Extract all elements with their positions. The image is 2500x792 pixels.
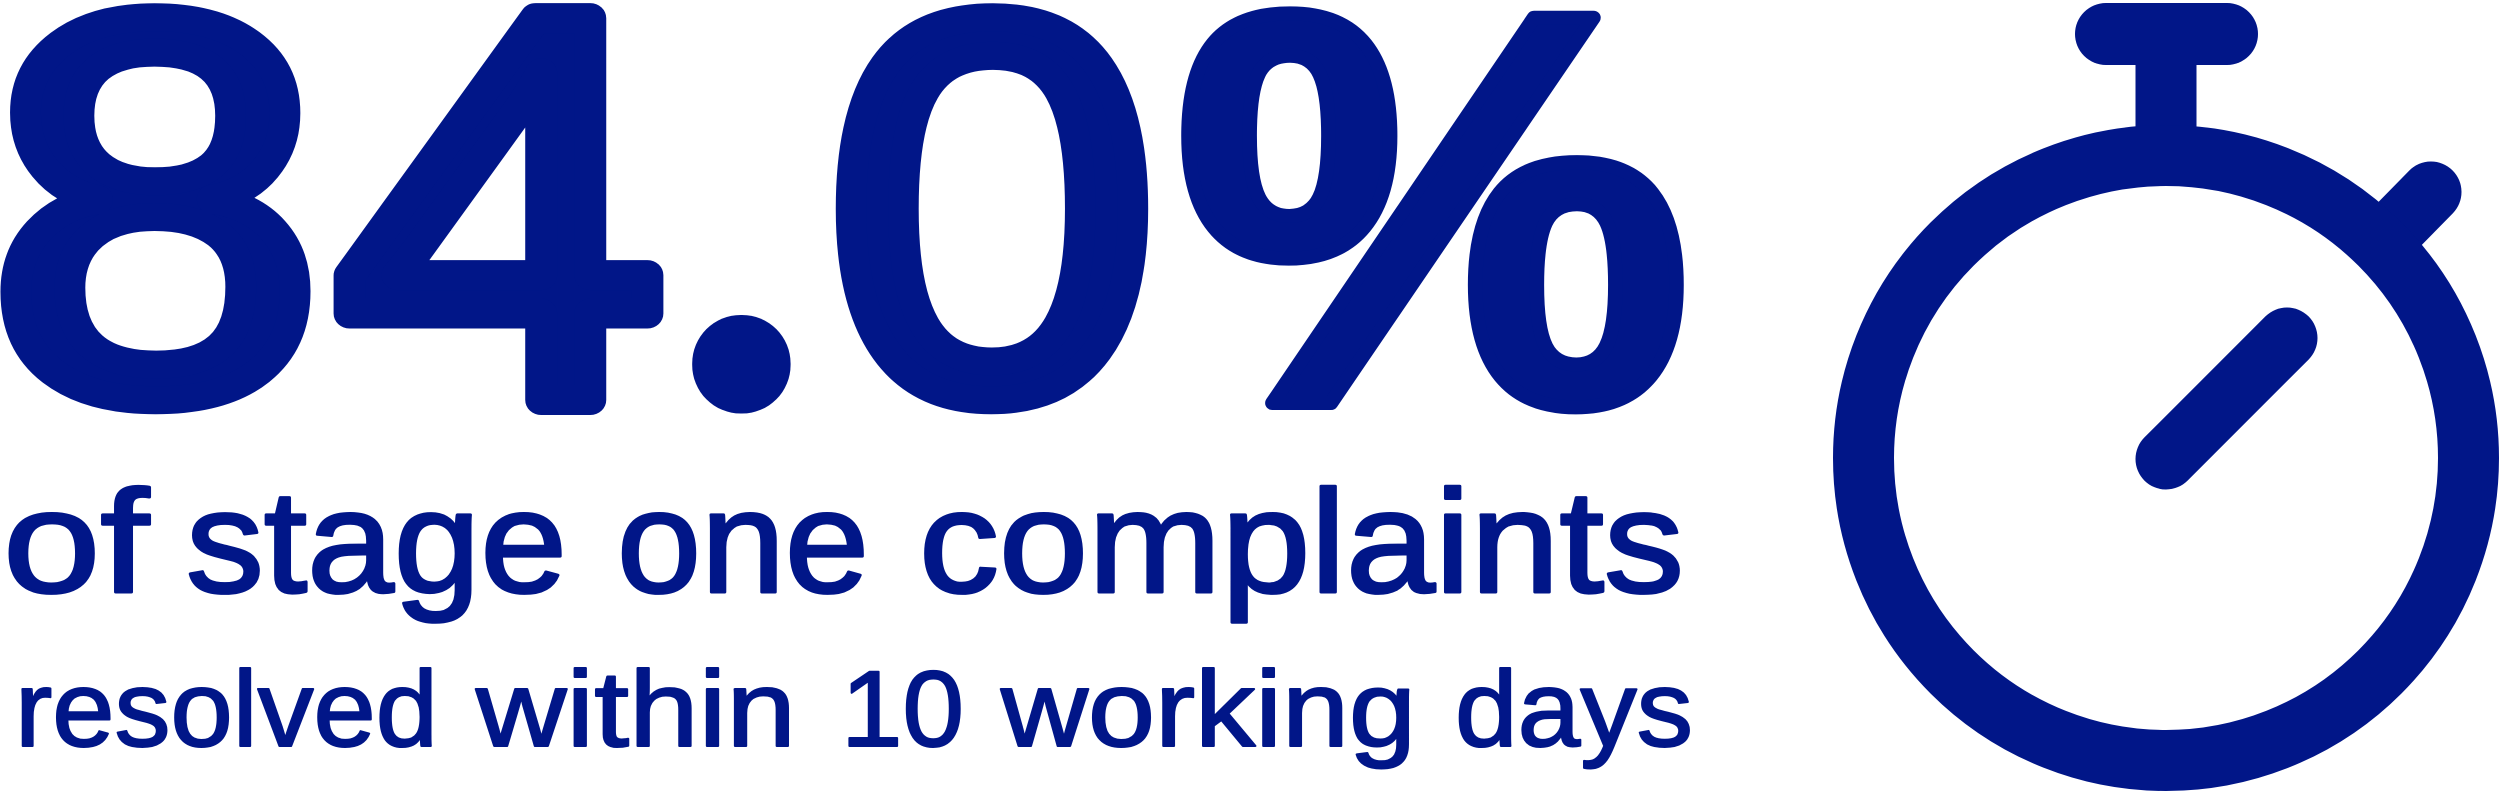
stopwatch ring (1864, 156, 2468, 760)
stopwatch top button (2075, 3, 2258, 65)
stopwatch side knob (2380, 192, 2431, 244)
headline figure: 84.0%: . (740, 357, 743, 368)
subtitle line two: 10 (841, 648, 964, 769)
stopwatch stem (2136, 40, 2196, 150)
subtitle line one: complaints (919, 460, 1684, 623)
stopwatch hand (2166, 338, 2287, 459)
icon: stopwatch (1864, 3, 2468, 760)
subtitle line one: one (617, 460, 869, 623)
subtitle line two: resolved (15, 648, 438, 769)
subtitle line one: of (3, 460, 150, 623)
subtitle line two: within (475, 648, 796, 769)
subtitle line two: working (1000, 648, 1416, 769)
subtitle line two (15, 648, 1693, 769)
headline figure: 84.0% (0, 0, 1692, 523)
subtitle line one: stage (186, 460, 567, 623)
subtitle line one (3, 460, 1684, 623)
subtitle line two: days (1455, 648, 1693, 769)
